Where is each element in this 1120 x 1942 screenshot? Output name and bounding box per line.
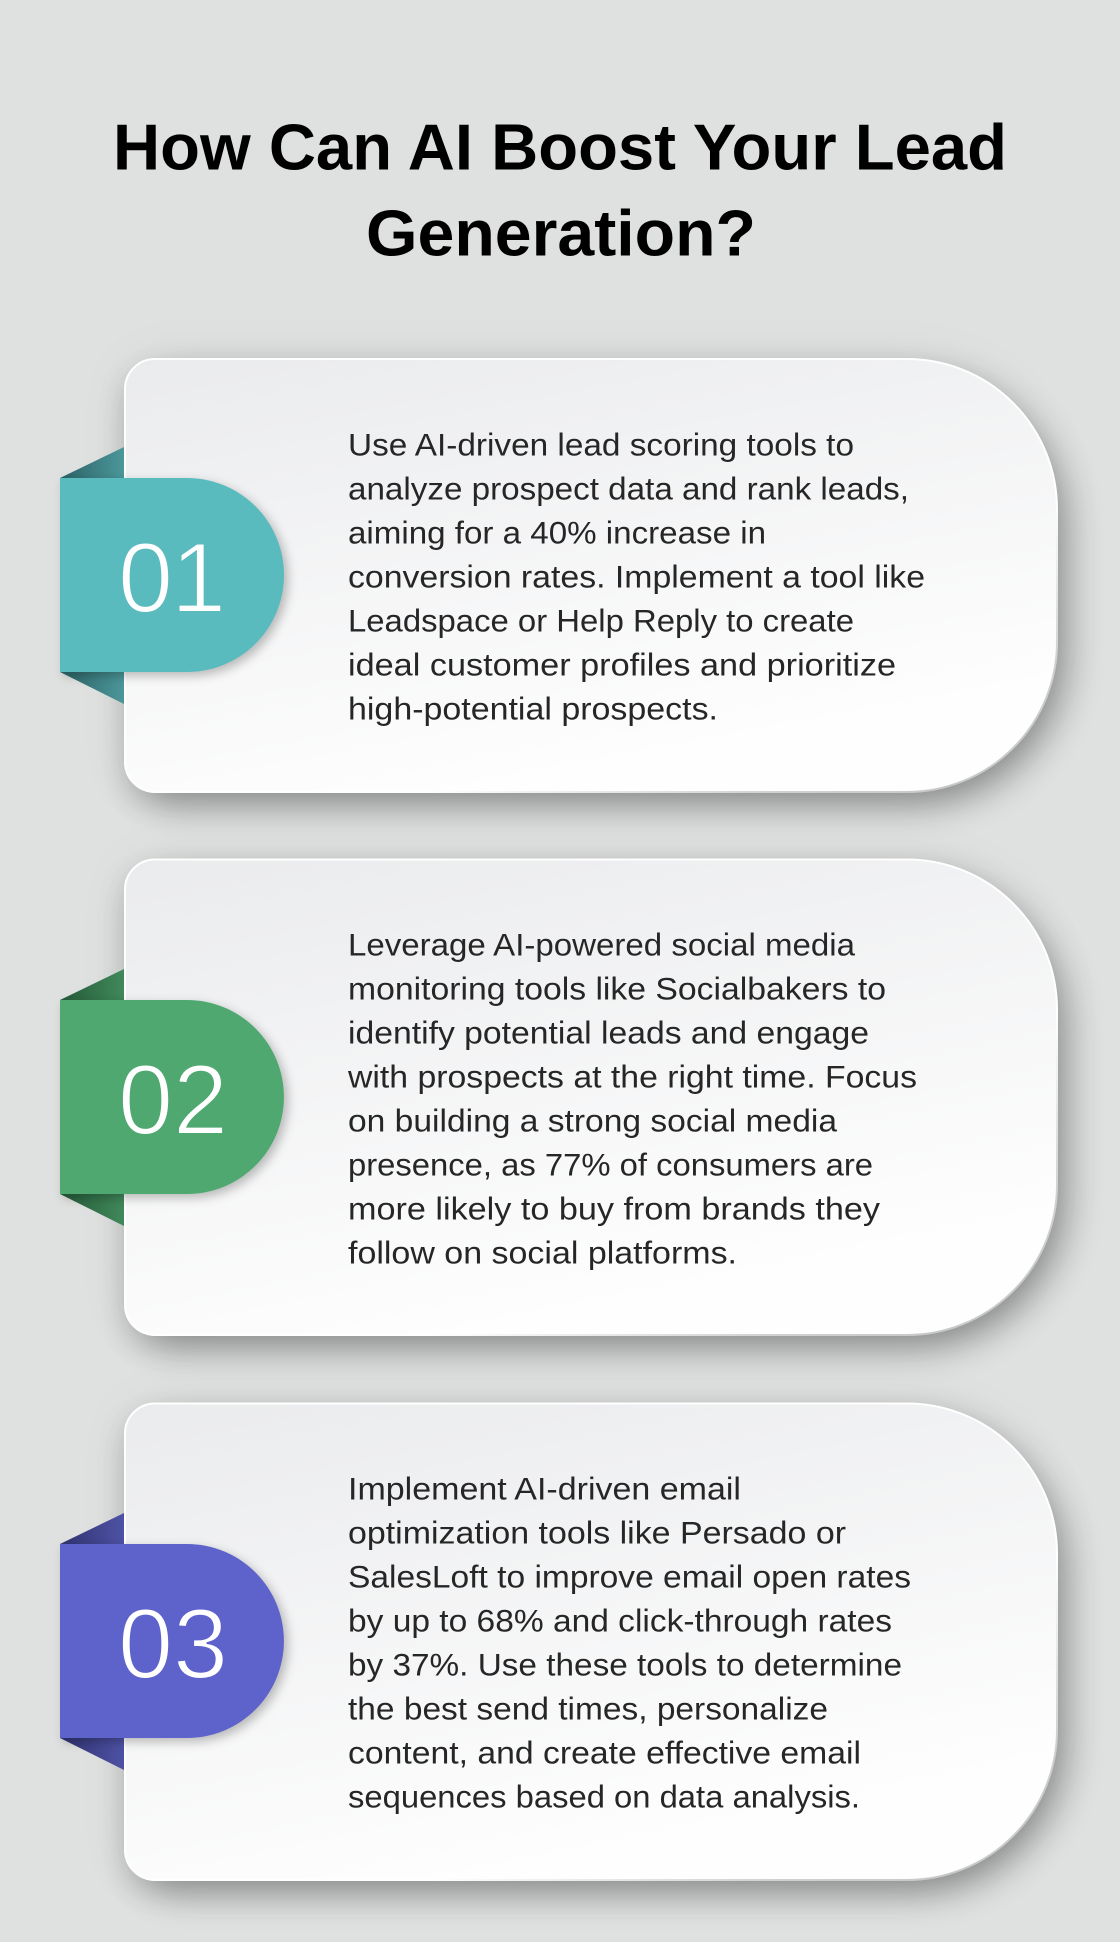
text block: step 1: Leadspace or Help Reply to create — [348, 603, 854, 639]
ribbon fold: step 2 top — [60, 969, 124, 1000]
number badge: 02 — [60, 1000, 284, 1194]
text block: step 2: Leverage AI-powered social media — [348, 927, 855, 963]
title: Generation? — [366, 196, 756, 270]
text block: step 2: identify potential leads and engage — [348, 1015, 869, 1051]
text block: step 2: presence, as 77% of consumers are — [348, 1147, 873, 1183]
number badge: 03 — [60, 1544, 284, 1738]
text block: step 3: Implement AI-driven email — [348, 1471, 741, 1507]
step 2 — [60, 860, 1057, 1335]
text block: step 2 — [347, 927, 917, 1271]
panel: step 2 card — [125, 860, 1057, 1335]
number badge: 03: 03 — [118, 1588, 228, 1699]
text block: step 1: Use AI-driven lead scoring tools to — [348, 427, 854, 463]
text block: step 2: more likely to buy from brands they — [348, 1191, 880, 1227]
text block: step 1: high-potential prospects. — [348, 691, 718, 727]
step 3 — [60, 1404, 1057, 1880]
text block: step 3: optimization tools like Persado or — [348, 1515, 846, 1551]
text block: step 3: SalesLoft to improve email open rates — [348, 1559, 911, 1595]
number badge: 01: 01 — [118, 522, 226, 633]
number badge: 02: 02 — [118, 1044, 228, 1155]
text block: step 3: sequences based on data analysis. — [348, 1779, 860, 1815]
text block: step 3: content, and create effective email — [348, 1735, 861, 1771]
text block: step 1 — [348, 427, 925, 727]
number badge: 01 — [60, 478, 284, 672]
ribbon fold: step 1 bottom — [60, 672, 124, 704]
text block: step 2: monitoring tools like Socialbakers to — [348, 971, 886, 1007]
ribbon fold: step 3 top — [60, 1513, 124, 1544]
text block: step 1: aiming for a 40% increase in — [348, 515, 766, 551]
text block: step 1: conversion rates. Implement a tool like — [348, 559, 925, 595]
text block: step 3: by 37%. Use these tools to determine — [348, 1647, 902, 1683]
text block: step 3: the best send times, personalize — [348, 1691, 828, 1727]
text block: step 3 — [348, 1471, 911, 1815]
ribbon fold: step 3 bottom — [60, 1738, 124, 1770]
step 1 — [60, 359, 1057, 792]
text block: step 1: analyze prospect data and rank leads, — [348, 471, 909, 507]
text block: step 3: by up to 68% and click-through rates — [348, 1603, 892, 1639]
ribbon fold: step 2 bottom — [60, 1194, 124, 1226]
panel: step 1 card — [125, 359, 1057, 792]
text block: step 2: with prospects at the right time. Focus — [347, 1059, 917, 1095]
text block: step 1: ideal customer profiles and prioritize — [348, 647, 896, 683]
title — [113, 110, 1007, 270]
text block: step 2: on building a strong social media — [348, 1103, 838, 1139]
ribbon fold: step 1 top — [60, 447, 124, 478]
title: How Can AI Boost Your Lead — [113, 110, 1007, 184]
panel: step 3 card — [125, 1404, 1057, 1880]
text block: step 2: follow on social platforms. — [348, 1235, 737, 1271]
